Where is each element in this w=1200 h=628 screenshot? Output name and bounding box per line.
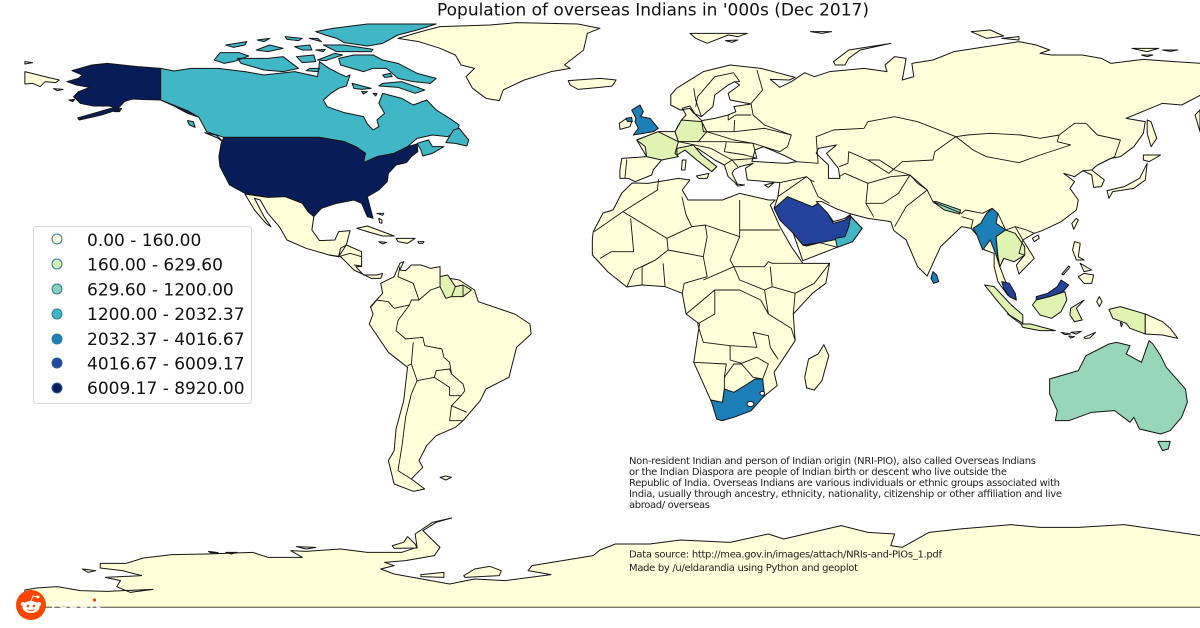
Madagascar bbox=[805, 345, 829, 390]
Caribbean islands bbox=[357, 213, 424, 244]
title: Population of overseas Indians in '000s (Dec 2017) bbox=[437, 0, 869, 20]
Peninsular Malaysia bbox=[1002, 282, 1016, 300]
region: Eurasia and Africa bbox=[592, 30, 1200, 451]
Italy bbox=[677, 145, 717, 172]
Mexico bbox=[245, 194, 350, 257]
France bbox=[637, 132, 678, 160]
Germany bbox=[675, 120, 707, 142]
legend row 5: 2032.37 - 4016.67 bbox=[87, 330, 245, 350]
Newfoundland, Nova Scotia, Vancouver Island bbox=[187, 121, 469, 156]
Japan, Sakhalin, Taiwan, Hainan, Philippines bbox=[1032, 120, 1161, 307]
mainland Canada bbox=[161, 62, 459, 163]
Tasmania bbox=[1158, 441, 1170, 451]
Saudi Arabia and UAE bbox=[774, 197, 851, 246]
Papua New Guinea bbox=[1145, 314, 1178, 338]
Africa bbox=[592, 178, 830, 421]
Iceland bbox=[568, 78, 616, 89]
legend row 3: 629.60 - 1200.00 bbox=[87, 280, 234, 300]
Lesotho bbox=[747, 401, 754, 407]
United States bbox=[219, 137, 418, 218]
region: Americas and Greenland bbox=[25, 23, 616, 491]
legend row 6: 4016.67 - 6009.17 bbox=[87, 354, 245, 374]
South American borders bbox=[452, 287, 455, 297]
Arctic islands bbox=[690, 30, 1200, 132]
United Kingdom bbox=[626, 105, 658, 135]
reddit wordmark: reddit bbox=[51, 598, 101, 612]
description text bbox=[629, 456, 1062, 511]
Mediterranean islands bbox=[682, 160, 774, 187]
African borders bbox=[594, 179, 659, 232]
Nepal bbox=[933, 202, 960, 214]
description text: Republic of India. Overseas Indians are various individuals or ethnic groups associated with bbox=[629, 478, 1060, 489]
Australia bbox=[1050, 341, 1187, 434]
legend row 4: 1200.00 - 2032.37 bbox=[87, 305, 245, 325]
legend bbox=[34, 226, 252, 404]
Chukotka fragment bbox=[25, 62, 63, 91]
United Kingdom and Ireland bbox=[619, 105, 658, 135]
description text: abroad/ overseas bbox=[629, 500, 710, 511]
Malaysian Borneo bbox=[1036, 280, 1069, 300]
Greenland bbox=[398, 23, 600, 101]
Thailand bbox=[996, 230, 1025, 267]
Eurasia bbox=[620, 42, 1200, 300]
Eurasian borders bbox=[751, 104, 791, 152]
Canada bbox=[161, 24, 469, 163]
Eswatini bbox=[760, 391, 765, 395]
credit: Made by /u/eldarandia using Python and geoplot bbox=[629, 563, 858, 574]
Myanmar bbox=[973, 208, 1006, 267]
South Africa bbox=[711, 379, 765, 421]
Alaska bbox=[67, 63, 199, 120]
legend row 1: 0.00 - 160.00 bbox=[87, 231, 201, 251]
description text: Non-resident Indian and person of Indian origin (NRI-PIO), also called Overseas Indians bbox=[629, 456, 1036, 467]
Central America bbox=[329, 245, 383, 278]
Sri Lanka bbox=[931, 272, 939, 283]
icon: reddit logo bbox=[16, 590, 46, 620]
Guianas bbox=[440, 275, 471, 298]
Indonesia bbox=[985, 285, 1145, 334]
description text: or the Indian Diaspora are people of Indian birth or descent who live outside the bbox=[629, 467, 1007, 478]
description text: India, usually through ancestry, ethnicity, nationality, citizenship or other affiliation and live bbox=[629, 489, 1062, 500]
legend row 7: 6009.17 - 8920.00 bbox=[87, 379, 245, 399]
South America bbox=[369, 262, 531, 491]
legend row 2: 160.00 - 629.60 bbox=[87, 256, 223, 276]
reddit dot bbox=[93, 598, 96, 602]
small Indonesian islands bbox=[1061, 322, 1123, 339]
Antarctica bbox=[25, 518, 1200, 607]
legend box bbox=[34, 226, 252, 404]
Black Sea bbox=[752, 147, 797, 163]
baseline of the map bbox=[25, 606, 1200, 608]
Canadian Arctic islands bbox=[214, 24, 436, 96]
Ireland bbox=[619, 118, 632, 129]
Oman bbox=[835, 217, 862, 247]
Caspian Sea bbox=[816, 145, 840, 178]
data source: Data source: http://mea.gov.in/images/attach/NRIs-and-PIOs_1.pdf bbox=[629, 550, 942, 560]
